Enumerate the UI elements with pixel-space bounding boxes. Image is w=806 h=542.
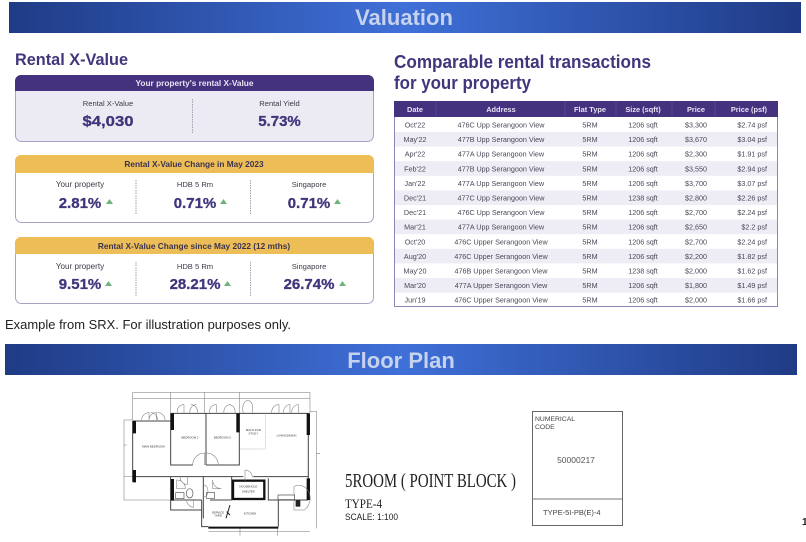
panel: your property's rental X-Value: 5.73% [258, 113, 301, 130]
table: comparable transactions: 1206 sqft [628, 179, 658, 188]
table: comparable transactions: $2.24 psf [737, 237, 767, 246]
panel: change since May 2022: 28.21% [170, 276, 220, 293]
floor plan drawing: SERVICE [212, 510, 224, 514]
table: comparable transactions: $2.74 psf [737, 120, 767, 130]
table: comparable transactions: 477B Upp Serangoon View [458, 135, 545, 144]
table: comparable transactions: 5RM [582, 237, 598, 246]
table: comparable transactions: Feb'22 [404, 164, 426, 173]
table: comparable transactions: 1206 sqft [628, 164, 658, 173]
floor plan drawing: LIVING/DINING [277, 434, 297, 438]
heading: Comparable rental transactions: Comparable rental transactions [394, 52, 651, 72]
table: comparable transactions: Price [687, 105, 705, 114]
table: comparable transactions: 5RM [582, 164, 598, 173]
panel: change in May 2023: HDB 5 Rm [177, 180, 213, 189]
panel: change since May 2022: Singapore [292, 262, 326, 271]
numerical code box: TYPE-5I-PB(E)-4 [543, 508, 601, 517]
numerical code box: 50000217 [557, 455, 595, 465]
table: comparable transactions: 1206 sqft [628, 237, 658, 246]
table: comparable transactions: 1206 sqft [628, 296, 658, 305]
table: comparable transactions [394, 101, 778, 306]
table: comparable transactions: 476C Upp Serangoon View [458, 208, 545, 217]
title block: 5 room point block: SCALE: 1:100 [345, 512, 398, 523]
table: comparable transactions: 5RM [582, 296, 598, 305]
table: comparable transactions: $2,650 [685, 223, 707, 232]
table: comparable transactions: Size (sqft) [625, 105, 661, 114]
panel: your property's rental X-Value: Rental X-Value [83, 99, 133, 108]
table: comparable transactions: $3,700 [685, 179, 707, 188]
table: comparable transactions: $3,670 [685, 135, 707, 144]
panel: change in May 2023: Singapore [292, 180, 326, 189]
solid black columns [133, 413, 310, 529]
table: comparable transactions: $1.49 psf [737, 281, 767, 290]
table: comparable transactions: 477A Upper Serangoon View [455, 281, 548, 290]
table: comparable transactions: 477A Upp Serangoon View [458, 179, 545, 188]
note: example source: Example from SRX. For illustration purposes only. [5, 318, 291, 332]
panel: change in May 2023: 0.71% [288, 195, 330, 212]
table: comparable transactions: $2,700 [685, 237, 707, 246]
table: comparable transactions: 476C Upper Serangoon View [454, 252, 548, 261]
table: comparable transactions: 5RM [582, 194, 598, 202]
table: comparable transactions: Apr'22 [405, 150, 425, 159]
table: comparable transactions: Dec'21 [404, 194, 426, 202]
table: comparable transactions: $3,300 [685, 120, 707, 130]
table: comparable transactions: Jun'19 [405, 296, 425, 305]
table: comparable transactions: 476C Upper Serangoon View [454, 296, 548, 305]
table: comparable transactions: 1206 sqft [628, 252, 658, 261]
panel: change since May 2022: Your property [56, 262, 105, 271]
panel: your property's rental X-Value: $4,030 [82, 113, 134, 130]
table: comparable transactions: $2,000 [685, 296, 707, 305]
table: comparable transactions: 5RM [582, 252, 598, 261]
table: comparable transactions: Address [486, 105, 516, 114]
panel: change in May 2023: 0.71% [174, 195, 216, 212]
table: comparable transactions: $3.04 psf [737, 135, 767, 144]
floor plan drawing: MULTI-PUR [246, 428, 261, 432]
table: comparable transactions: 5RM [582, 281, 598, 290]
heading: Comparable rental transactions [394, 52, 651, 93]
floor plan drawing: BEDROOM 3 [214, 435, 231, 439]
table: comparable transactions: 1206 sqft [628, 208, 658, 217]
table: comparable transactions: $1.91 psf [737, 150, 767, 159]
banner: Valuation: Valuation [355, 5, 453, 30]
panel: change since May 2022: Rental X-Value Change since May 2022 (12 mths) [98, 241, 290, 251]
doors [142, 400, 310, 510]
table: comparable transactions: 477A Upp Serangoon View [458, 223, 545, 232]
dimension lines [124, 392, 320, 536]
table: comparable transactions: 477B Upp Serangoon View [458, 164, 545, 173]
table: comparable transactions: 5RM [582, 223, 598, 232]
numerical code box: NUMERICAL [535, 416, 575, 423]
floor plan drawing: YARD [214, 514, 222, 518]
table: comparable transactions: $1.62 psf [737, 266, 767, 276]
panel: change since May 2022: HDB 5 Rm [177, 262, 213, 271]
table: comparable transactions: $3,550 [685, 164, 707, 173]
table: comparable transactions: 476C Upper Serangoon View [454, 237, 548, 246]
table: comparable transactions: $2.2 psf [741, 223, 767, 232]
table: comparable transactions: $2.26 psf [737, 194, 767, 202]
table: comparable transactions: 5RM [582, 135, 598, 144]
floor plan drawing: STUDY [249, 431, 258, 435]
numerical code box: CODE [535, 424, 555, 431]
table: comparable transactions: 5RM [582, 208, 598, 217]
table: comparable transactions: $2,000 [685, 266, 707, 276]
table: comparable transactions: 1206 sqft [628, 135, 658, 144]
table: comparable transactions: 1206 sqft [628, 150, 658, 159]
table: comparable transactions: Oct'22 [405, 120, 425, 130]
table: comparable transactions: $2,700 [685, 208, 707, 217]
table: comparable transactions: 1206 sqft [628, 120, 658, 130]
floor plan drawing: SHELTER [242, 489, 255, 493]
table: comparable transactions: 5RM [582, 150, 598, 159]
floor plan drawing: HOUSEHOLD [239, 485, 257, 489]
table: comparable transactions: $2.94 psf [737, 164, 767, 173]
table: comparable transactions: 5RM [582, 179, 598, 188]
table: comparable transactions: 1206 sqft [628, 281, 658, 290]
panel: your property's rental X-Value: Rental Yield [259, 99, 300, 108]
table: comparable transactions: Jan'22 [405, 179, 425, 188]
banner: Floor Plan [5, 344, 797, 375]
panel: your property's rental X-Value [15, 75, 374, 142]
title block: 5 room point block [345, 470, 516, 523]
numerical code box [532, 412, 623, 526]
table: comparable transactions: $2,200 [685, 252, 707, 261]
room labels: MAIN BEDROOM [142, 445, 165, 449]
table: comparable transactions: 477C Upp Serangoon View [458, 194, 545, 202]
floor plan drawing: KITCHEN [244, 511, 256, 515]
table: comparable transactions: 1238 sqft [628, 266, 658, 276]
walls [133, 413, 308, 527]
table: comparable transactions: Price (psf) [731, 105, 768, 114]
table: comparable transactions: $1,800 [685, 281, 707, 290]
panel: change in May 2023: Your property [56, 180, 105, 189]
banner: Valuation [9, 2, 801, 33]
table: comparable transactions: 476B Upper Serangoon View [455, 266, 548, 276]
floor plan drawing: BEDROOM 2 [182, 435, 199, 439]
table: comparable transactions: 477A Upp Serangoon View [458, 150, 545, 159]
table: comparable transactions: Date [407, 105, 423, 114]
heading: Rental X-Value: Rental X-Value [15, 51, 128, 69]
panel: change in May 2023: 2.81% [59, 195, 101, 212]
panel: change since May 2022 [15, 237, 374, 304]
table: comparable transactions: $2,300 [685, 150, 707, 159]
title block: 5 room point block: TYPE-4 [345, 496, 382, 511]
table: comparable transactions: 1238 sqft [628, 194, 658, 202]
panel: your property's rental X-Value: Your property's rental X-Value [135, 78, 254, 88]
table: comparable transactions: $2.24 psf [737, 208, 767, 217]
table: comparable transactions: May'22 [404, 135, 426, 144]
table: comparable transactions: 5RM [582, 266, 598, 276]
table: comparable transactions: Mar'20 [404, 281, 426, 290]
table: comparable transactions: Oct'20 [405, 237, 425, 246]
table: comparable transactions: $3.07 psf [737, 179, 767, 188]
table: comparable transactions: May'20 [404, 266, 426, 276]
table: comparable transactions: Dec'21 [404, 208, 426, 217]
banner: Floor Plan: Floor Plan [347, 348, 455, 373]
floor plan drawing [124, 392, 320, 536]
table: comparable transactions: 476C Upp Serangoon View [458, 120, 545, 130]
table: comparable transactions: $1.82 psf [737, 252, 767, 261]
title block: 5 room point block: 5ROOM ( POINT BLOCK ) [345, 470, 516, 492]
table: comparable transactions: Aug'20 [404, 252, 426, 261]
table: comparable transactions: $2,800 [685, 194, 707, 202]
table: comparable transactions: Mar'21 [404, 223, 426, 232]
panel: change in May 2023 [15, 155, 374, 222]
panel: change since May 2022: 9.51% [59, 276, 101, 293]
panel: change in May 2023: Rental X-Value Change in May 2023 [124, 159, 264, 169]
heading: Comparable rental transactions: for your property [394, 73, 531, 93]
table: comparable transactions: 5RM [582, 120, 598, 130]
table: comparable transactions: Flat Type [574, 105, 606, 114]
table: comparable transactions: 1206 sqft [628, 223, 658, 232]
table: comparable transactions: $1.66 psf [737, 296, 767, 305]
panel: change since May 2022: 26.74% [284, 276, 334, 293]
